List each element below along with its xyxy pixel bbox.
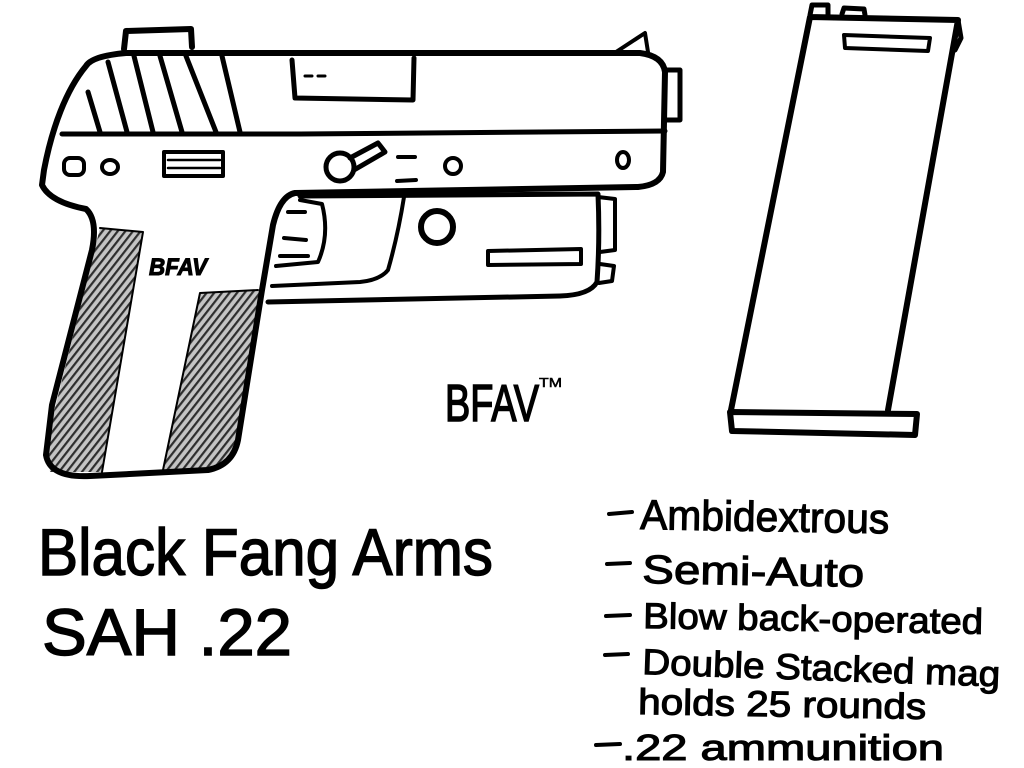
slide details [62,29,680,181]
slide and grip outline [42,53,665,476]
feature list [596,491,1001,768]
brand logo: TM [539,375,562,390]
pistol illustration [42,29,680,476]
frame and accessory rail [268,194,615,302]
grip panels hatching [47,228,260,472]
magazine illustration [730,5,961,435]
title: SAH .22 [42,595,292,669]
feature list: Semi-Auto [642,548,865,596]
feature list: .22 ammunition [622,727,944,768]
feature list: holds 25 rounds [638,681,927,727]
brand logo: BFAV [445,375,539,433]
feature list: Ambidextrous [640,491,890,542]
title [38,515,493,669]
grip logo: BFAV [149,254,209,281]
feature list: Blow back-operated [643,595,984,642]
feature list: Double Stacked mag [642,641,1001,694]
title: Black Fang Arms [38,515,493,589]
